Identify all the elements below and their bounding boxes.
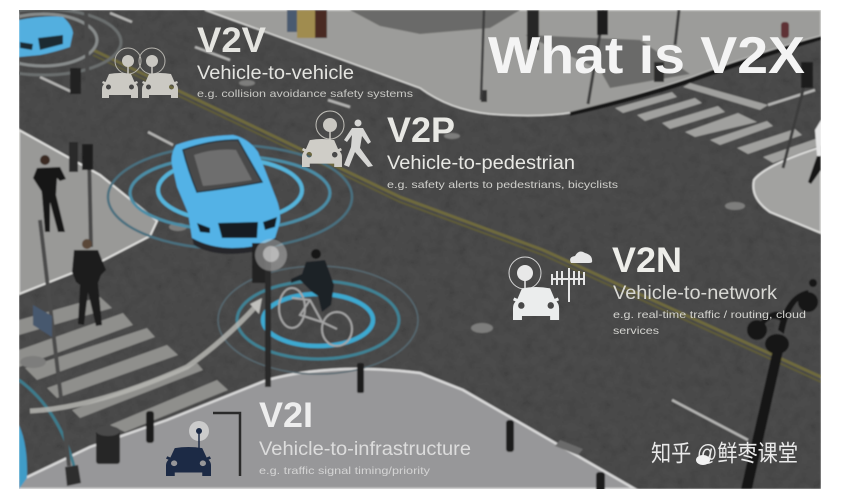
icon: V2I car, antenna and signal pole — [166, 413, 240, 476]
watermark: 知乎 @鲜枣课堂 — [651, 440, 798, 466]
pole with street sign — [33, 220, 81, 486]
text block: V2P: Vehicle-to-pedestrian — [387, 153, 575, 174]
bollards — [146, 62, 664, 492]
text block: V2V: e.g. collision avoidance safety systems — [197, 88, 413, 100]
text block: V2N: V2N — [612, 241, 682, 280]
text block: V2V: V2V — [197, 21, 267, 60]
blue car top left — [19, 16, 73, 57]
text block: V2V: Vehicle-to-vehicle — [197, 63, 354, 84]
top sidewalk — [205, 10, 821, 116]
lane dashes — [40, 13, 815, 440]
left sidewalk — [19, 130, 157, 294]
icon: V2P car and pedestrian — [302, 111, 373, 167]
crosswalk left — [19, 297, 228, 432]
pedestrian right edge — [808, 120, 821, 184]
traffic light pole — [252, 239, 287, 387]
bottom sidewalk — [19, 369, 635, 489]
blue car main — [172, 135, 282, 254]
crosswalk right — [615, 83, 821, 163]
pole and signals top left — [69, 10, 93, 247]
text block: V2I: Vehicle-to-infrastructure — [259, 439, 471, 460]
rings: main car — [108, 145, 352, 249]
icon: V2N car, tower and cloud — [509, 252, 592, 320]
pedestrian man — [72, 239, 106, 326]
text block: V2N: e.g. real-time traffic / routing, cloud — [613, 309, 806, 321]
text block: V2V — [197, 21, 413, 100]
right corner sidewalk — [753, 147, 821, 233]
sidewalk shadows — [350, 10, 690, 88]
blue car bottom left — [19, 425, 27, 489]
text block: V2N: Vehicle-to-network — [613, 283, 778, 304]
text block: V2N: services — [613, 325, 659, 337]
text block: V2I: V2I — [259, 396, 313, 435]
text block: V2N — [612, 241, 806, 337]
rings: top left car — [19, 10, 123, 77]
street poles top — [481, 10, 810, 168]
text block: V2P: e.g. safety alerts to pedestrians, bicyclists — [387, 179, 618, 191]
text block: V2P: V2P — [387, 111, 455, 150]
yellow center line — [93, 50, 821, 377]
cyclist — [279, 249, 352, 346]
rings: bottom left corner — [19, 380, 75, 470]
kiosk — [287, 10, 327, 38]
rings: bicycle — [218, 266, 418, 374]
hydrant — [781, 22, 789, 38]
trash bin — [96, 426, 120, 464]
pedestrian woman — [33, 155, 66, 232]
text block: V2P — [387, 111, 618, 191]
text block: V2I: e.g. traffic signal timing/priority — [259, 465, 431, 477]
title: What is V2X — [488, 27, 805, 85]
manholes — [20, 80, 745, 368]
icon: V2V cars with antennas — [102, 48, 178, 98]
drain grate — [555, 440, 583, 455]
curved arrow to traffic light — [30, 298, 262, 411]
top right curb shadow — [570, 36, 821, 116]
traffic signals top right — [597, 10, 813, 88]
street lamp — [741, 279, 818, 489]
text block: V2I — [259, 396, 471, 477]
